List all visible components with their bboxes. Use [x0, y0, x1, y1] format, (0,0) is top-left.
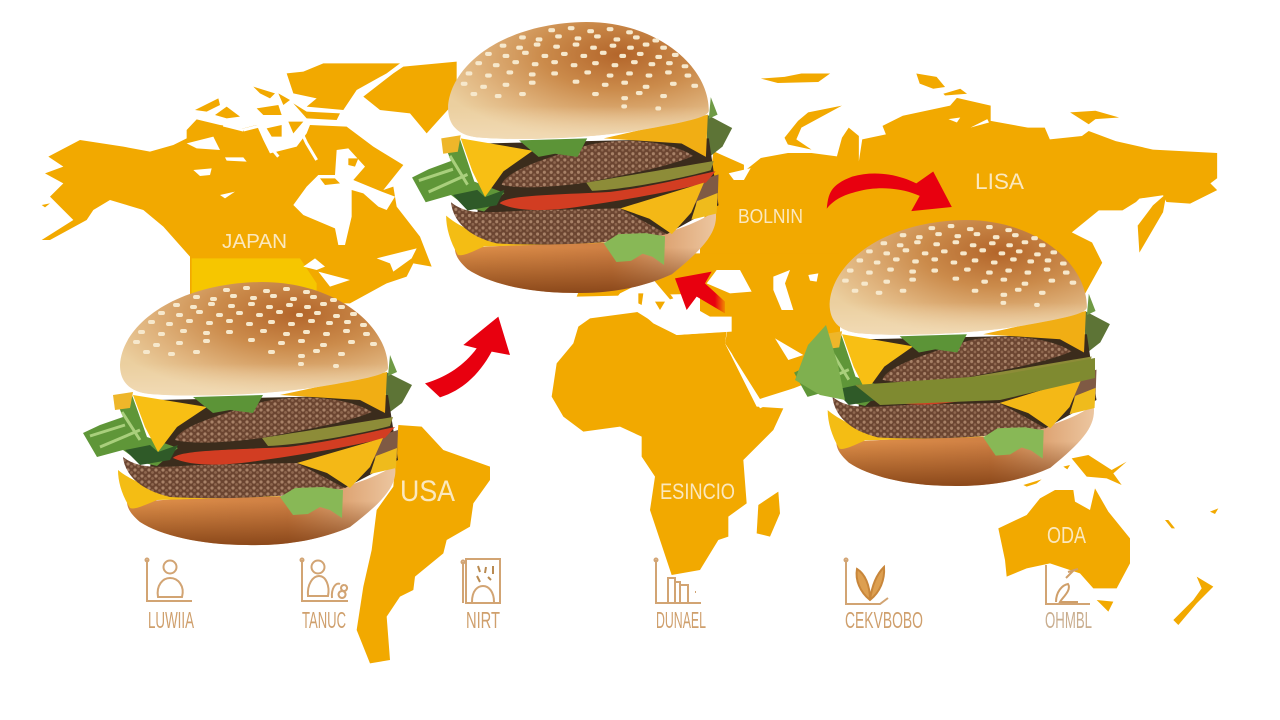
- label: Luwiia: LUWIIA: [148, 607, 194, 633]
- icon: framed arch: [462, 559, 500, 603]
- arrow: from South America: [425, 317, 510, 397]
- label: Tanuc: TANUC: [302, 607, 346, 633]
- label: Australia: ODA: [1047, 522, 1087, 548]
- icon: sprout and figure: [1046, 565, 1090, 604]
- label: Cekvbobo: CEKVBOBO: [845, 607, 923, 633]
- icon: person and small figure: [300, 558, 348, 601]
- North America and Arctic islands: [42, 62, 457, 303]
- burger: left: [83, 282, 412, 545]
- label: Japan: JAPAN: [222, 231, 287, 253]
- label: Dunael: DUNAEL: [656, 607, 706, 633]
- label: Africa: ESINCIO: [660, 479, 735, 504]
- Australia, New Guinea and New Zealand: [998, 455, 1218, 625]
- arrow: over Asia: [827, 172, 952, 211]
- icon: person and bun: [146, 558, 192, 601]
- label: Bolnin: BOLNIN: [738, 206, 803, 228]
- burger: right: [794, 220, 1110, 486]
- icon: wheat plant: [844, 558, 888, 604]
- label: Ohmbl: OHMBL: [1045, 607, 1092, 633]
- arrow: over Europe: [675, 272, 725, 313]
- Africa and the Middle East: [552, 253, 840, 575]
- label: lower USA: USA: [400, 475, 455, 508]
- South America: [357, 425, 490, 663]
- label: top USA: LISA: [975, 169, 1024, 194]
- icon: buildings: [654, 558, 701, 603]
- Europe and Asia: [700, 74, 1217, 317]
- world map: [42, 62, 1218, 663]
- label: Nirt: NIRT: [466, 607, 500, 633]
- burger: top centre: [412, 22, 732, 293]
- map labels: [222, 169, 1087, 548]
- icon row: [146, 558, 1092, 633]
